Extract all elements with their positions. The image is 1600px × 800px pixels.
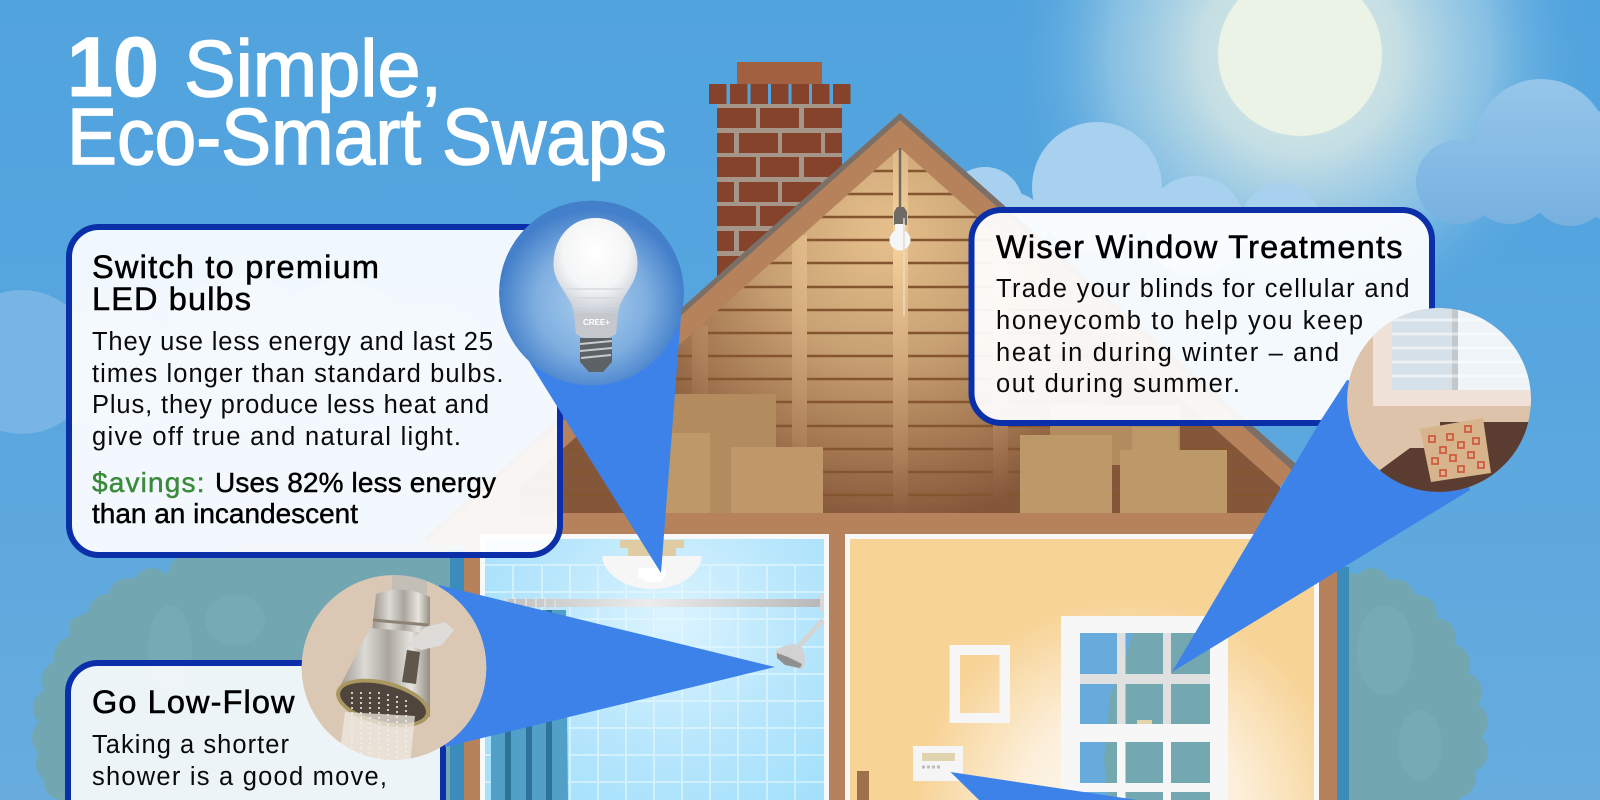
title [67,20,667,181]
bathroom [480,534,829,800]
heading: LED bulbs [92,281,251,317]
callout pointer: shower head [439,585,775,747]
shower curtain [491,610,568,800]
attic posts [692,149,1008,496]
photo: LED bulb [499,200,684,386]
cloud at left [0,275,485,434]
ceiling lamp [602,540,702,589]
body text: They use less energy and last 25 [92,328,493,356]
storage boxes left [660,394,823,513]
attic light bulb [890,148,910,316]
body text: Trade your blinds for cellular and [996,275,1410,303]
body text [92,731,387,791]
callout pointer: window [1172,380,1470,672]
clouds behind the house [947,122,1321,276]
tile grid [485,565,824,800]
title: 10 [67,20,159,114]
tree right [1340,568,1488,800]
thermostat [913,746,963,781]
wall picture frame [950,645,1010,723]
body text: give off true and natural light. [92,423,461,451]
clouds at right [1416,79,1600,227]
photo: LED bulb: CREE+ [583,318,610,327]
info box: LED bulbs [69,227,560,555]
info box: low-flow shower [68,663,443,800]
attic interior [520,148,1280,513]
savings line: $avings: [92,467,204,498]
callout pointer: thermostat [950,772,1137,800]
info box: window treatments [972,210,1432,423]
house shadow strips [450,550,1349,800]
door edge [857,771,869,800]
curtain rod [505,594,824,612]
heading: Switch to premium [92,249,379,285]
shower head [776,620,823,669]
body text: honeycomb to help you keep [996,307,1363,335]
body text: out during summer. [996,370,1240,398]
body text: shower is a good move, [92,763,387,791]
savings line: Uses 82% less energy [215,467,496,498]
body text: times longer than standard bulbs. [92,360,504,388]
body text: Taking a shorter [92,731,290,759]
chimney [709,62,850,304]
house walls [464,513,1337,800]
tree left [32,545,455,800]
savings line: than an incandescent [92,498,358,529]
glass door [1061,616,1230,800]
heading: Wiser Window Treatments [996,229,1402,265]
roof [424,113,1298,545]
storage boxes right [1020,405,1227,513]
savings line [92,467,496,529]
photo: shower head [302,570,486,765]
callout pointer: bulb to bathroom lamp [522,250,683,573]
title: Eco-Smart Swaps [67,92,667,181]
attic planks [520,171,1280,495]
body text: heat in during winter – and [996,339,1339,367]
heading: Go Low-Flow [92,684,295,720]
living room [845,534,1319,800]
heading [92,249,379,317]
body text: Plus, they produce less heat and [92,391,489,419]
sun glow [1010,0,1590,344]
photo: window with cellular shades [1347,305,1535,500]
body text [996,275,1410,398]
body text [92,328,504,451]
title: Simple, [184,24,442,113]
sun [1218,0,1382,136]
